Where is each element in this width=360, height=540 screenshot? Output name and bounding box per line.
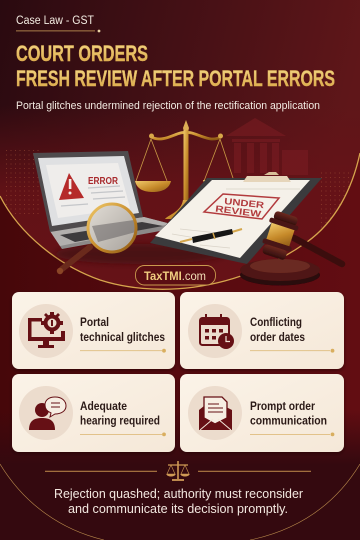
card: prompt order communication (180, 374, 344, 452)
icon: calendar with clock (200, 314, 234, 349)
icon: small scale (166, 461, 190, 480)
title: COURT ORDERS (16, 41, 148, 66)
kicker: Case Law - GST (16, 15, 94, 27)
pen (180, 229, 242, 243)
brand pill (136, 266, 216, 285)
card: portal technical glitches: technical glitches (80, 330, 165, 344)
stamp: under review: REVIEW (215, 204, 262, 219)
bottom thin arcs (0, 464, 360, 540)
card: portal technical glitches: Portal (80, 315, 109, 329)
icon: monitor with gear (28, 312, 65, 348)
kicker (16, 15, 100, 32)
card: adequate hearing required: Adequate (80, 399, 127, 413)
stamp: under review (204, 194, 279, 219)
icon: warning triangle (59, 173, 84, 200)
icon: balance scale (135, 120, 235, 219)
table shadow (55, 244, 225, 264)
court building silhouette (226, 118, 308, 175)
card: portal technical glitches (12, 292, 175, 369)
icon: open envelope (199, 397, 232, 430)
subtitle: Portal glitches undermined rejection of the rectification application (16, 100, 320, 112)
footer divider with scale icon (45, 461, 311, 480)
laptop (33, 151, 171, 249)
card: prompt order communication: communication (250, 414, 327, 428)
card: conflicting order dates: Conflicting (250, 315, 302, 329)
card: conflicting order dates: order dates (250, 330, 305, 344)
conclusion text: Rejection quashed; authority must reconsider (54, 486, 304, 501)
magnifier (57, 204, 136, 274)
brand pill: TaxTMI.com (144, 271, 206, 283)
conclusion text: and communicate its decision promptly. (68, 501, 288, 516)
gavel (240, 209, 342, 286)
card: adequate hearing required (12, 374, 175, 452)
illustration (33, 120, 342, 286)
card: adequate hearing required: hearing required (80, 414, 160, 428)
laptop: ERROR (88, 175, 118, 187)
clipboard (150, 172, 322, 264)
conclusion text (54, 486, 304, 516)
title (16, 41, 335, 91)
card: conflicting order dates (180, 292, 344, 369)
icon: person with speech bubble (29, 397, 66, 430)
stamp: under review: UNDER (224, 196, 265, 210)
gold arc (0, 153, 360, 289)
card: prompt order communication: Prompt order (250, 399, 315, 413)
